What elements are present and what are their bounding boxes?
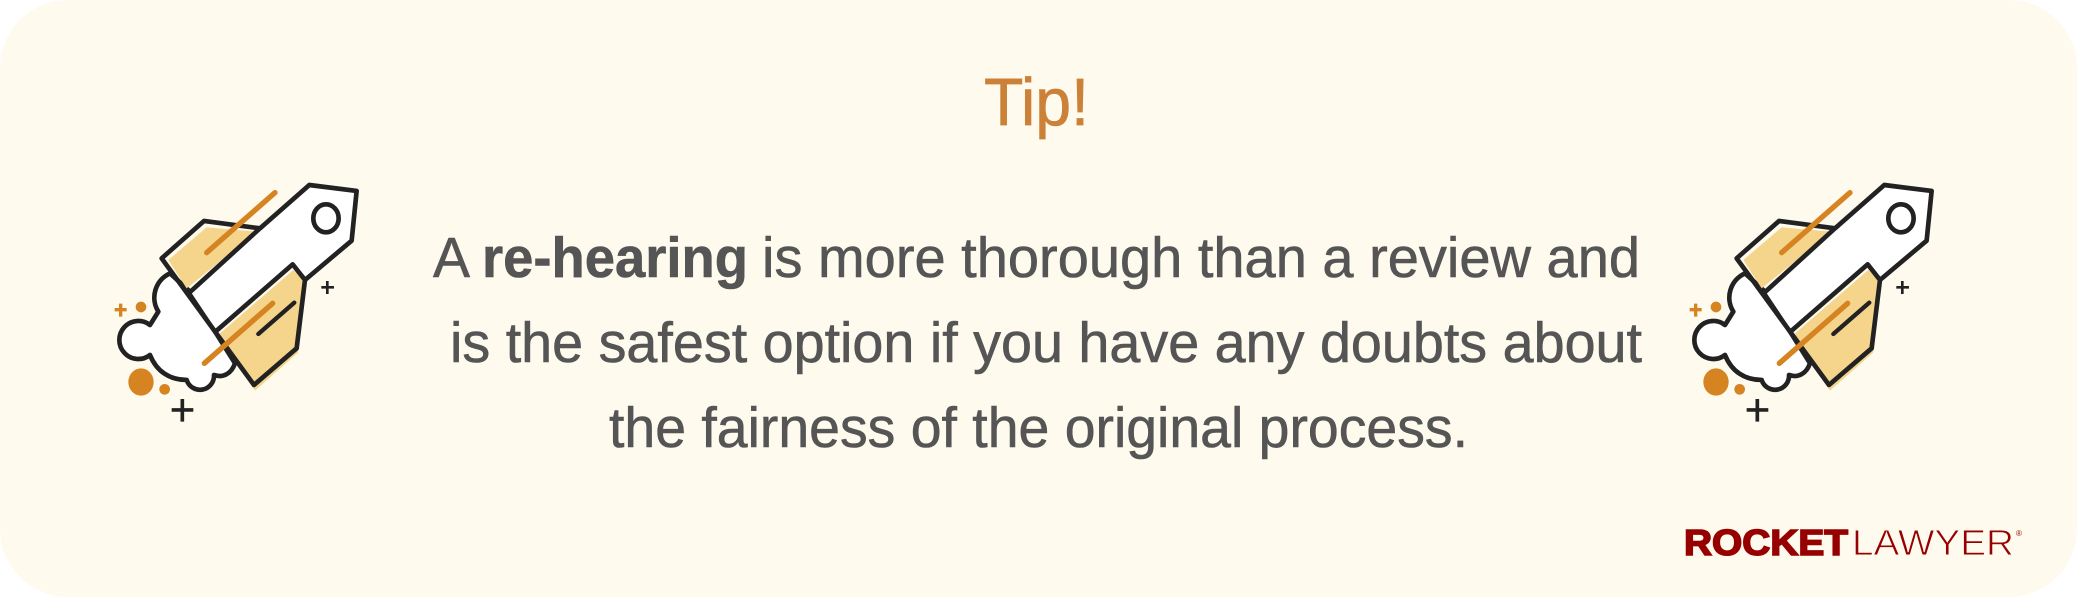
logo: Rocket Lawyer <box>1684 522 2022 563</box>
logo: Rocket Lawyer: ROCKET <box>1684 522 1848 563</box>
icon: rocket right <box>1690 185 1932 422</box>
icon: rocket left <box>115 185 357 422</box>
logo: Rocket Lawyer: LAWYER <box>1852 522 2014 563</box>
title: Tip! <box>984 65 1089 140</box>
text block: tip message <box>433 226 1642 460</box>
text block: tip message: A <box>433 226 470 290</box>
logo: Rocket Lawyer: ® <box>2016 529 2022 538</box>
text block: tip message: is more thorough than a review and <box>762 226 1640 290</box>
text block: tip message: is the safest option if you have any doubts about <box>450 311 1642 375</box>
text block: tip message: the fairness of the original process. <box>609 396 1468 460</box>
text block: tip message: re-hearing <box>482 226 748 290</box>
